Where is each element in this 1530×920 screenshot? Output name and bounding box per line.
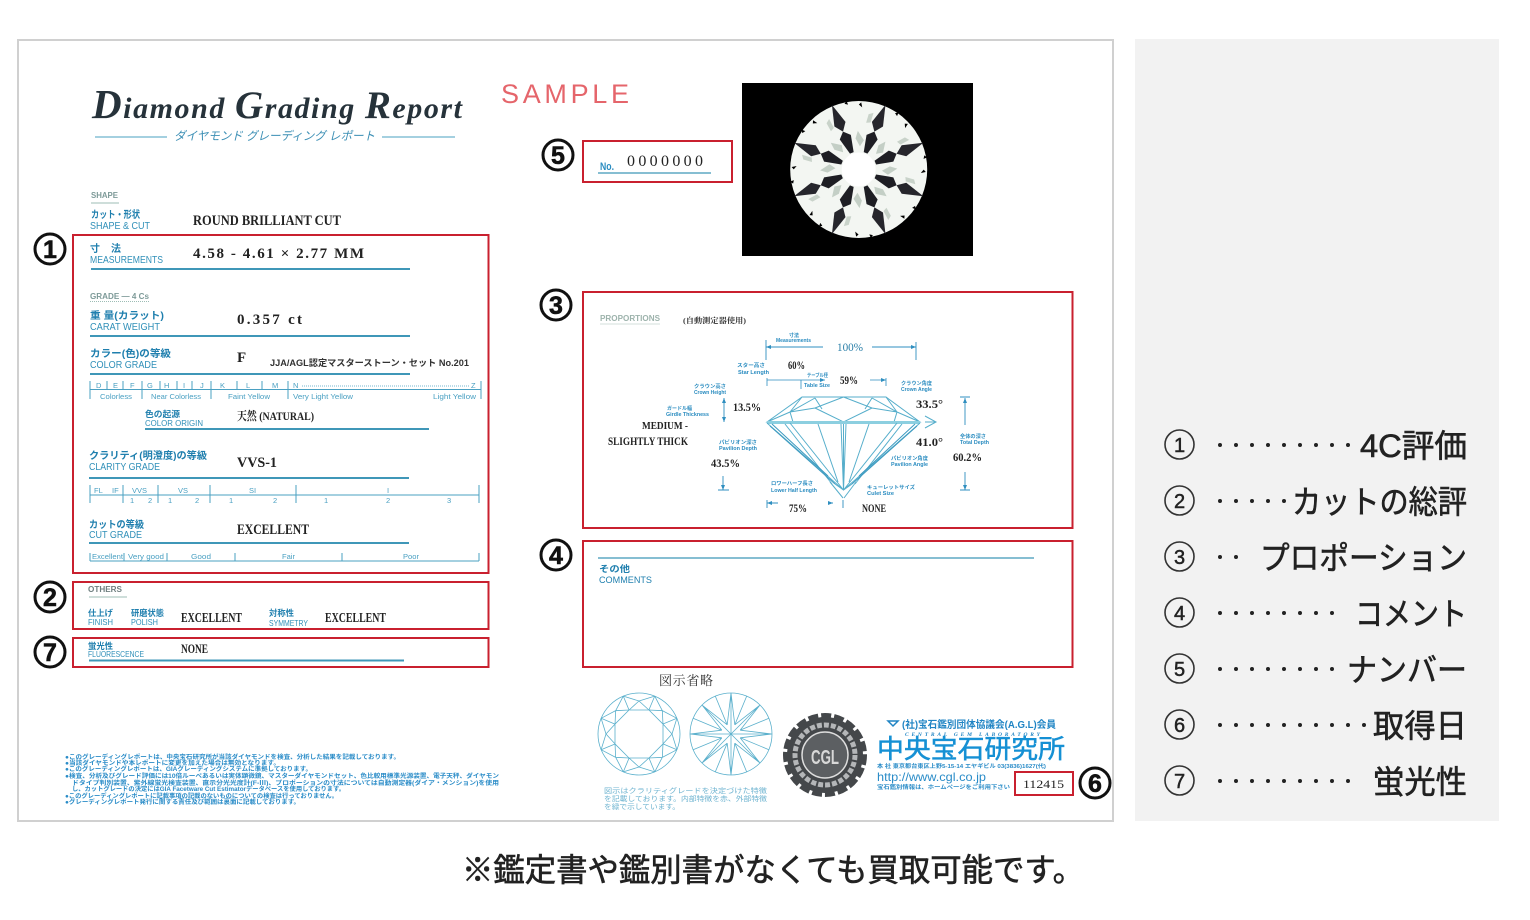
clarity scale: 1: [168, 496, 172, 505]
section: color origin: 天然 (NATURAL): [237, 409, 314, 423]
section: carat weight: CARAT WEIGHT: [90, 322, 160, 333]
clarity scale: SI: [249, 486, 256, 495]
badge 4: [541, 540, 571, 570]
icon: laboratory seal: [786, 716, 864, 794]
color scale: N: [293, 381, 298, 390]
section: cut grade: EXCELLENT: [237, 522, 309, 538]
section: carat weight: 重 量(カラット): [90, 309, 164, 322]
clarity scale: I: [387, 486, 389, 495]
clarity scale: IF: [112, 486, 119, 495]
proportion labels: 全体の深さ: [960, 433, 986, 440]
section: comments: その他: [599, 563, 630, 574]
color scale: Very Light Yellow: [293, 392, 354, 401]
logo: central gem laboratory: [877, 718, 1065, 791]
label: SAMPLE: SAMPLE: [501, 79, 629, 109]
cut scale: Fair: [282, 552, 295, 561]
proportion values: SLIGHTLY THICK: [608, 434, 689, 448]
badge 3: 3: [549, 292, 563, 320]
legend row 7: 7: [1174, 771, 1185, 793]
clarity scale: FL: [94, 486, 103, 495]
section: clarity grade: VVS-1: [237, 455, 277, 471]
section: measurements: [90, 242, 410, 269]
proportion labels: Pavilion Depth: [719, 446, 757, 452]
badge 3: [541, 290, 571, 320]
diamond side profile: [767, 397, 936, 498]
proportion labels: キューレットサイズ: [867, 484, 915, 491]
proportion labels: クラウン角度: [901, 380, 932, 387]
proportion labels: Crown Height: [694, 390, 726, 396]
proportion labels: クラウン高さ: [694, 383, 726, 390]
logo: central gem laboratory: 中央宝石研究所: [877, 734, 1065, 764]
clarity scale: [90, 485, 479, 505]
section: color grade: JJA/AGL認定マスターストーン・セット No.201: [270, 357, 469, 368]
badge 2: [35, 582, 65, 612]
section: carat weight: [90, 292, 410, 336]
proportion labels: Star Length: [738, 370, 769, 376]
color scale: Faint Yellow: [228, 392, 271, 401]
proportion values: MEDIUM -: [642, 421, 688, 432]
color scale: Light Yellow: [433, 392, 477, 401]
title: Diamond Grading Report: Diamond Grading Report: [91, 81, 464, 127]
clarity scale: 1: [229, 496, 233, 505]
diagram caption: を記載しております。内部特徴を赤、外部特徴: [604, 794, 767, 803]
section: fluorescence: FLUORESCENCE: [88, 649, 144, 659]
color scale: [90, 381, 481, 401]
diagram caption: [604, 786, 767, 811]
color scale: D: [96, 381, 102, 390]
chart: proportions diagram: PROPORTIONS: [600, 314, 661, 323]
proportion values: 60.2%: [953, 450, 982, 464]
section: others: [88, 585, 386, 628]
diagram: pavilion facets: [690, 693, 772, 775]
section: shape and cut: ROUND BRILLIANT CUT: [193, 213, 341, 229]
diagram caption: 図示はクラリティグレードを決定づけた特徴: [604, 786, 767, 795]
notes text block: ●当該ダイヤモンドや本レポートに変更を加えた場合は無効となります。: [65, 759, 280, 767]
red box: 4 comments: [583, 541, 1072, 667]
proportion labels: [666, 332, 989, 497]
clarity scale: 2: [386, 496, 390, 505]
legend row 4: [1165, 596, 1467, 632]
color scale: E: [113, 381, 118, 390]
proportion values: 13.5%: [733, 400, 761, 414]
section: comments: [598, 558, 1034, 585]
notes text block: ドタイプ判別装置、紫外線蛍光検査装置、直示分光光度計(F-Ⅲ)、プロポーションの寸法については自動測定器(ダイア・メンション)を使用: [72, 779, 499, 787]
image: diamond arrows pattern: [742, 83, 973, 256]
notes text block: ●グレーディングレポート発行に関する責任及び範囲は裏面に記載しております。: [65, 798, 300, 806]
section: clarity grade: [89, 449, 409, 478]
red box: 7 fluorescence: [73, 638, 488, 667]
proportion values: 41.0°: [916, 435, 943, 449]
proportion labels: パビリオン深さ: [719, 439, 757, 446]
red box: 1 4C grading: [73, 235, 488, 573]
proportion labels: ロワーハーフ長さ: [771, 480, 813, 487]
badge 1: 1: [43, 236, 57, 264]
red box: 6 date: [1015, 772, 1073, 795]
color scale: H: [164, 381, 169, 390]
proportion labels: テーブル径: [807, 372, 828, 379]
diagram: crown facets: [598, 693, 680, 775]
color scale: Near Colorless: [151, 392, 201, 401]
proportion labels: Crown Angle: [901, 387, 932, 393]
legend row 1: [1165, 428, 1467, 464]
section: clarity grade: CLARITY GRADE: [89, 462, 160, 473]
diagram caption: を緑で示しています。: [604, 802, 680, 811]
title: Diamond Grading Report: ダイヤモンド グレーディング レポート: [174, 129, 375, 143]
icon: laboratory seal: CGL: [811, 747, 839, 769]
section: others: 研磨状態: [131, 608, 164, 618]
number field: [598, 153, 711, 173]
legend row 5: 5: [1174, 659, 1185, 681]
section: measurements: MEASUREMENTS: [90, 255, 163, 266]
logo: central gem laboratory: http://www.cgl.co.jp: [877, 770, 986, 784]
section: color grade: [90, 347, 469, 374]
footer note: ※鑑定書や鑑別書がなくても買取可能です。: [462, 852, 1084, 888]
cut scale: Good: [191, 552, 211, 561]
color scale: J: [200, 381, 204, 390]
badge 5: [543, 140, 573, 170]
clarity scale: 3: [447, 496, 451, 505]
proportion labels: Lower Half Length: [771, 488, 817, 494]
badge 4: 4: [549, 542, 563, 570]
section: others: EXCELLENT: [325, 611, 386, 626]
color scale: I: [183, 381, 185, 390]
proportion labels: Girdle Thickness: [666, 412, 709, 418]
color scale: Z: [471, 381, 476, 390]
clarity scale: 1: [324, 496, 328, 505]
logo: central gem laboratory: (社)宝石鑑別団体協議会(A.G.L)会員: [902, 718, 1056, 731]
proportion values: NONE: [862, 501, 886, 515]
legend row 6: 6: [1174, 715, 1185, 737]
proportion labels: Total Depth: [960, 440, 989, 446]
legend row 2: カットの総評: [1292, 484, 1467, 520]
section: clarity grade: クラリティ(明澄度)の等級: [89, 449, 207, 462]
notes text block: し、カットグレードの決定にはGIA Facetware Cut Estimatorデータベースを使用しております。: [72, 785, 345, 793]
section: cut grade: CUT GRADE: [89, 530, 142, 541]
clarity scale: VVS: [132, 486, 147, 495]
proportion labels: Measurements: [776, 338, 811, 344]
dimension lines and arrows: [718, 340, 970, 508]
notes text block: ●このグレーディングレポートは、中央宝石研究所が当該ダイヤモンドを検査、分析した結果を記載しております。: [65, 753, 400, 761]
legend row 5: [1165, 652, 1467, 688]
section: comments: COMMENTS: [599, 575, 652, 585]
section: carat weight: 0.357 ct: [237, 312, 302, 328]
clarity scale: 2: [195, 496, 199, 505]
section: others: POLISH: [131, 617, 158, 627]
badge 1: [35, 234, 65, 264]
number field: No.: [600, 161, 614, 173]
proportion labels: 寸法: [789, 332, 799, 339]
color scale: L: [246, 381, 250, 390]
section: measurements: 4.58 - 4.61 × 2.77 MM: [193, 246, 364, 262]
red box: 3 proportions: [583, 292, 1072, 528]
cut scale: [90, 552, 479, 561]
badge 5: 5: [551, 142, 565, 170]
badge 7: [35, 637, 65, 667]
clarity scale: 2: [273, 496, 277, 505]
red box: 5 number: [583, 141, 732, 182]
panel: legend background: [1135, 39, 1499, 821]
legend row 2: [1165, 484, 1467, 520]
proportion labels: Culet Size: [867, 491, 894, 497]
section: others: SYMMETRY: [269, 618, 308, 628]
section: others: FINISH: [88, 617, 113, 627]
color scale: Colorless: [100, 392, 132, 401]
section: color grade: F: [237, 350, 246, 366]
logo: central gem laboratory: 本 社 東京都台東区上野5-15-14 エヤギビル 03(3836)1627(代): [877, 762, 1046, 770]
notes text block: [65, 753, 499, 806]
section: shape and cut: [90, 191, 341, 232]
section: fluorescence: NONE: [181, 641, 208, 656]
section: carat weight: GRADE — 4 Cs: [90, 292, 150, 301]
color scale: M: [272, 381, 278, 390]
legend row 1: 4C評価: [1360, 428, 1467, 464]
section: others: OTHERS: [88, 585, 123, 594]
proportion labels: Pavilion Angle: [891, 462, 928, 468]
clarity scale: 2: [148, 496, 152, 505]
chart: proportions diagram: [600, 314, 989, 515]
badge 6: [1080, 768, 1110, 798]
section: fluorescence: 蛍光性: [88, 641, 113, 651]
legend row 3: プロポーション: [1260, 540, 1467, 576]
section: cut grade: [89, 518, 409, 543]
legend row 3: 3: [1174, 547, 1185, 569]
section: shape and cut: カット・形状: [91, 208, 140, 221]
section: fluorescence: [88, 641, 404, 660]
section: color origin: 色の起源: [145, 409, 180, 419]
proportion values: 75%: [789, 501, 807, 515]
red box: 2 cut summary: [73, 582, 488, 629]
proportion labels: Table Size: [804, 383, 830, 389]
section: others: 対称性: [269, 608, 294, 618]
report number 112415: 112415: [1023, 777, 1064, 791]
proportion values: [608, 340, 982, 515]
color scale: G: [147, 381, 153, 390]
proportion values: 100%: [837, 340, 863, 354]
cut scale: Very good: [128, 552, 164, 561]
number field: 0000000: [627, 153, 703, 170]
color scale: F: [130, 381, 135, 390]
proportion values: 59%: [840, 373, 858, 387]
badge 2: 2: [43, 584, 57, 612]
notes text block: ●検査、分析及びグレード評価には10倍ルーペあるいは実体顕微鏡、マスターダイヤモンドセット、色比較用標準光源装置、電子天秤、ダイヤモン: [65, 772, 499, 780]
section: measurements: 寸 法: [90, 242, 121, 255]
section: color grade: COLOR GRADE: [90, 360, 157, 371]
proportion labels: パビリオン角度: [891, 455, 928, 462]
legend row 7: 蛍光性: [1373, 764, 1467, 800]
legend row 5: ナンバー: [1347, 652, 1467, 688]
section: color grade: カラー(色)の等級: [90, 347, 171, 360]
legend row 4: コメント: [1355, 596, 1467, 632]
section: cut grade: カットの等級: [89, 518, 144, 531]
legend row 2: 2: [1174, 491, 1185, 513]
badge 7: 7: [43, 639, 57, 667]
heading: illustration omitted: 図示省略: [659, 673, 713, 688]
legend row 3: [1165, 540, 1467, 576]
section: shape and cut: SHAPE & CUT: [90, 221, 150, 232]
section: others: EXCELLENT: [181, 611, 242, 626]
cut scale: Poor: [403, 552, 420, 561]
notes text block: ●このグレーディングレポートに記載事項の記載のないものについての検査は行っておりません。: [65, 792, 338, 800]
legend row 6: [1165, 708, 1467, 744]
legend row 1: 1: [1174, 435, 1185, 457]
proportion labels: スター高さ: [737, 362, 765, 369]
legend row 7: [1165, 764, 1467, 800]
section: color origin: COLOR ORIGIN: [145, 418, 203, 428]
clarity scale: VS: [178, 486, 188, 495]
notes text block: ●このグレーディングレポートは、GIAグレーディングシステムに準拠しております。: [65, 765, 312, 773]
proportion values: 43.5%: [711, 456, 740, 470]
section: shape and cut: SHAPE: [91, 191, 119, 200]
panel: report sheet frame: [18, 40, 1113, 821]
clarity scale: 1: [130, 496, 134, 505]
logo: central gem laboratory: 宝石鑑別情報は、ホームページをご利用下さい: [877, 783, 1011, 791]
legend row 6: 取得日: [1373, 708, 1467, 744]
proportion labels: ガードル幅: [667, 405, 692, 412]
section: others: 仕上げ: [88, 608, 113, 618]
color scale: K: [220, 381, 225, 390]
logo: central gem laboratory: CENTRAL GEM LABORATORY: [905, 732, 1041, 738]
cut scale: Excellent: [92, 552, 124, 561]
proportion values: 60%: [788, 358, 805, 372]
chart: proportions diagram: (自動測定器使用): [683, 315, 747, 325]
proportion values: 33.5°: [916, 397, 943, 411]
legend row 4: 4: [1174, 603, 1185, 625]
badge 6: 6: [1088, 770, 1102, 798]
section: color origin: [145, 409, 429, 429]
